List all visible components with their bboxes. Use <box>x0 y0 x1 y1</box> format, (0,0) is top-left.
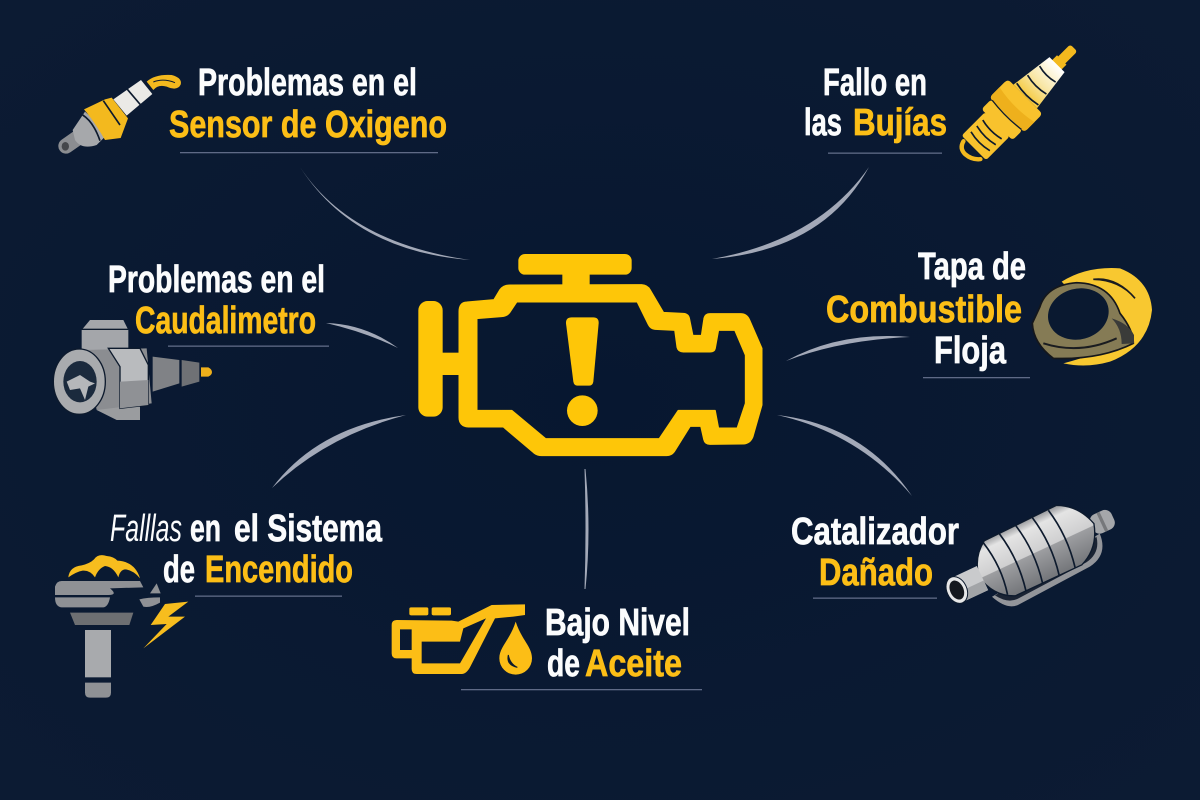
icon: catalytic converter <box>933 486 1130 630</box>
label: Bajo Nivel de Aceite: de <box>547 643 580 685</box>
icon: spark plug <box>949 30 1091 173</box>
label: Problemas en el Sensor de Oxigeno: Sensor de Oxigeno <box>169 104 447 146</box>
label: Bajo Nivel de Aceite: Aceite <box>585 643 682 685</box>
label: Falllas en el Sistema de Encendido <box>110 508 383 597</box>
item: mass airflow sensor <box>53 259 329 420</box>
label: Fallo en las Bujías: las <box>804 102 842 144</box>
label: Problemas en el Sensor de Oxigeno: Problemas en el <box>198 62 417 104</box>
label: Bajo Nivel de Aceite: Bajo Nivel <box>545 602 690 644</box>
icon: flow meter <box>53 320 212 420</box>
label: Fallo en las Bujías: Bujías <box>853 102 947 144</box>
label: Problemas en el Caudalimetro <box>108 259 329 347</box>
label: Falllas en el Sistema de Encendido: Encendido <box>205 549 353 591</box>
item: catalytic converter <box>791 486 1130 630</box>
label: Problemas en el Caudalimetro: Caudalimetro <box>135 300 316 342</box>
label: Tapa de Combustible Floja <box>826 246 1030 378</box>
label: Problemas en el Sensor de Oxigeno <box>169 62 447 153</box>
icon: oxygen sensor <box>62 75 181 151</box>
central icon: check engine warning <box>418 254 762 455</box>
label: Tapa de Combustible Floja: Floja <box>934 330 1007 372</box>
item: low oil level <box>392 602 702 690</box>
label: Catalizador Dañado: Catalizador <box>791 511 959 553</box>
label: Fallo en las Bujías: Fallo en <box>823 62 927 104</box>
label: Catalizador Dañado <box>791 511 959 599</box>
icon: oil can with drop <box>392 604 532 675</box>
label: Catalizador Dañado: Dañado <box>819 552 933 594</box>
label: Falllas en el Sistema de Encendido: Falllas <box>110 508 182 550</box>
item: fuel cap <box>826 246 1152 378</box>
icon: fuel cap <box>1032 268 1152 365</box>
item: spark plugs <box>804 30 1091 173</box>
label: Problemas en el Caudalimetro: Problemas en el <box>108 259 325 301</box>
label: Fallo en las Bujías <box>804 62 947 154</box>
label: Falllas en el Sistema de Encendido: en <box>190 508 221 550</box>
label: Bajo Nivel de Aceite <box>461 602 702 690</box>
label: Tapa de Combustible Floja: Combustible <box>826 289 1022 331</box>
item: oxygen sensor <box>62 62 447 153</box>
label: Tapa de Combustible Floja: Tapa de <box>918 246 1026 288</box>
icon: ignition distributor with spark <box>55 555 188 698</box>
item: ignition system <box>55 508 383 698</box>
connector lines <box>272 167 912 589</box>
label: Falllas en el Sistema de Encendido: de <box>163 549 195 591</box>
label: Falllas en el Sistema de Encendido: el Sistema <box>234 508 383 550</box>
